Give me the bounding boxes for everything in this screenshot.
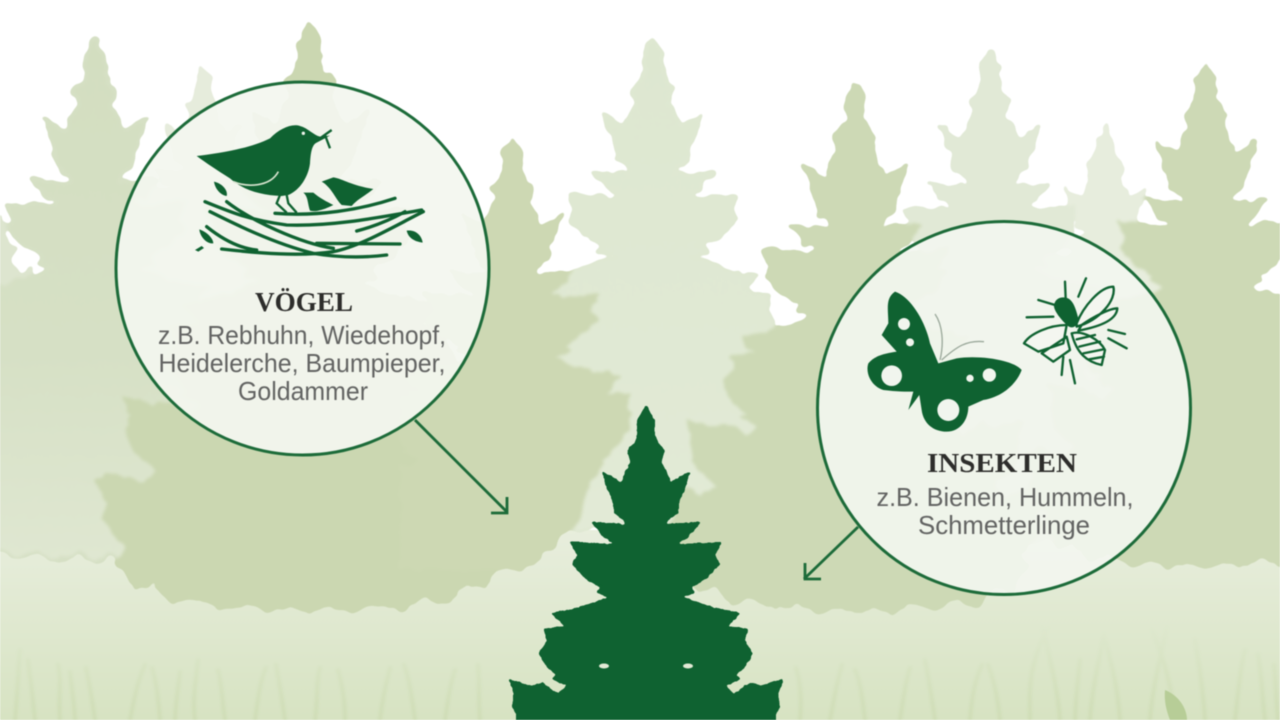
- text: insect species: z.B. Bienen, Hummeln,: [876, 482, 1134, 512]
- pale tree centre right: [809, 50, 1171, 547]
- icon: butterfly: [867, 292, 1022, 432]
- circle: birds: [116, 82, 489, 455]
- foreground spruce tree: [510, 407, 782, 720]
- arrow: insects to tree: [804, 527, 858, 579]
- meadow leaf: [1165, 690, 1187, 720]
- tree behind left circle: [95, 22, 525, 612]
- text: bird species: Heidelerche, Baumpieper,: [158, 348, 446, 378]
- heading: insects: INSEKTEN: [927, 448, 1078, 478]
- heading: birds: VÖGEL: [255, 287, 353, 317]
- panel: birds: [116, 82, 489, 455]
- ground meadow: [0, 530, 1280, 720]
- icon: bee: [1024, 278, 1127, 383]
- tree far left: [0, 38, 285, 560]
- tree behind right circle: [662, 83, 1048, 612]
- left edge tree: [0, 215, 122, 550]
- tree right: [1023, 64, 1280, 567]
- text: insect species: Schmetterlinge: [918, 510, 1090, 540]
- meadow grass: [15, 622, 1278, 720]
- text: bird species: z.B. Rebhuhn, Wiedehopf,: [158, 320, 446, 350]
- arrow: birds to tree: [415, 420, 507, 513]
- panel: insects: [818, 222, 1190, 594]
- circle: insects: [818, 222, 1190, 594]
- text: bird species: [158, 320, 446, 406]
- tree beside left circle: [426, 138, 632, 572]
- text: insect species: [876, 482, 1134, 540]
- text: bird species: Goldammer: [238, 376, 368, 406]
- far right pale tree: [955, 124, 1255, 537]
- far tree behind left circle: [62, 65, 344, 452]
- pale tree centre: [472, 38, 834, 535]
- icon: bird with chicks in nest: [195, 125, 423, 257]
